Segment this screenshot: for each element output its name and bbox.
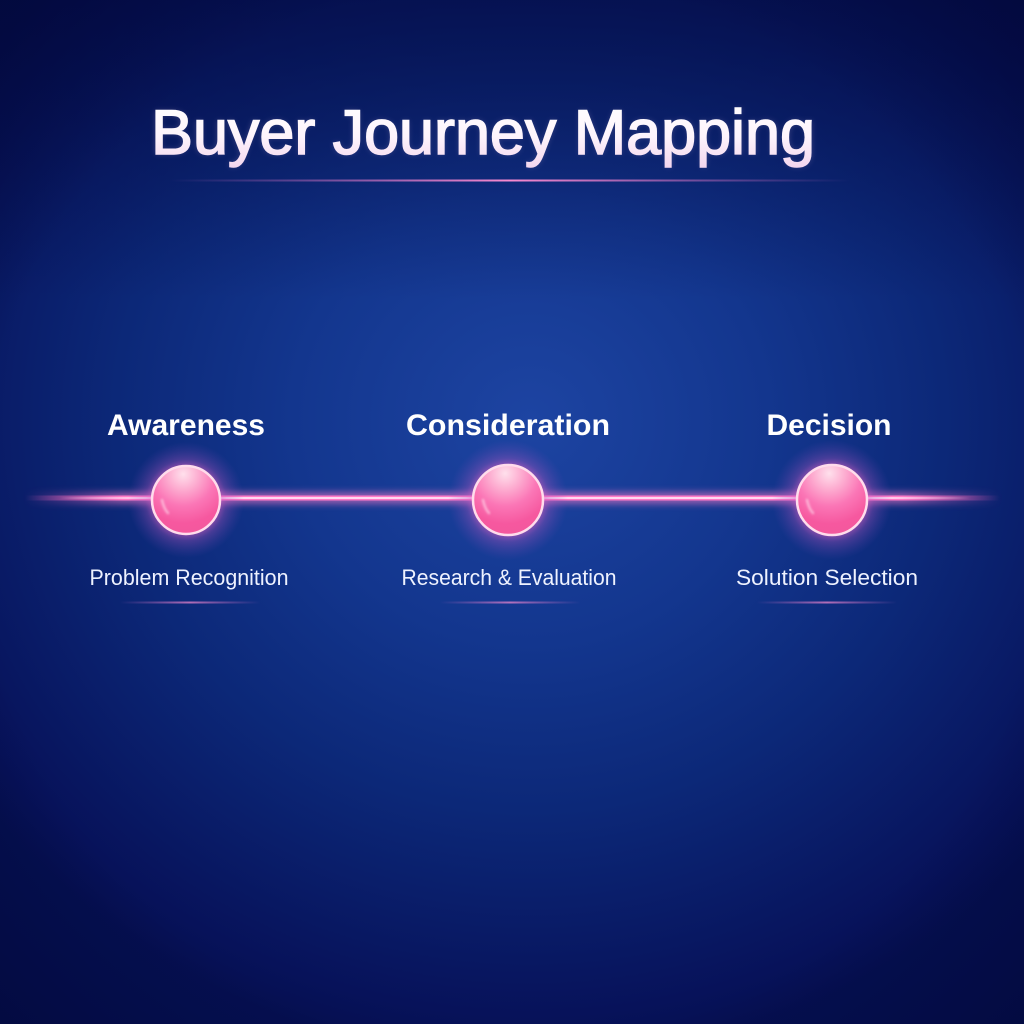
title underline — [170, 180, 850, 182]
node: Consideration orb — [448, 440, 568, 560]
title: Buyer Journey Mapping — [150, 98, 816, 168]
stage description: Research & Evaluation: Research & Evaluation — [402, 565, 616, 590]
stage heading: Decision: Decision — [766, 409, 892, 442]
timeline line — [25, 492, 1000, 504]
stage: Decision — [736, 409, 918, 604]
accent line: Awareness — [120, 602, 260, 604]
stage heading: Consideration: Consideration — [406, 409, 610, 442]
stage: Consideration — [402, 409, 616, 604]
accent line: Decision — [757, 602, 897, 604]
node: Decision orb — [772, 440, 892, 560]
stage heading: Awareness: Awareness — [107, 409, 265, 442]
stage description: Solution Selection: Solution Selection — [736, 565, 918, 590]
stage description: Problem Recognition: Problem Recognition — [90, 565, 288, 590]
node: Awareness orb — [128, 442, 244, 558]
title: Buyer Journey Mapping — [151, 98, 815, 168]
accent line: Consideration — [440, 602, 580, 604]
stage: Awareness — [90, 409, 288, 604]
